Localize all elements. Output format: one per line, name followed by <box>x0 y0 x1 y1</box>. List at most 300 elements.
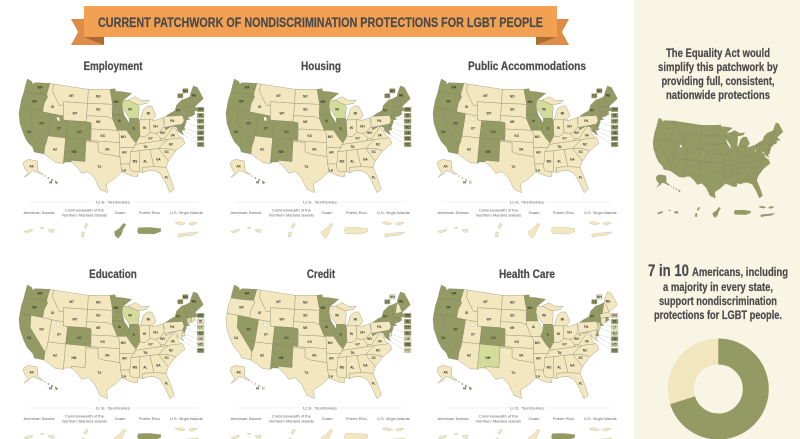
state labels: OR <box>239 305 244 309</box>
state labels: RI <box>613 114 616 118</box>
state labels: NM <box>486 150 491 154</box>
state labels: AZ <box>467 147 471 151</box>
state labels: NV <box>39 122 45 126</box>
state labels: HI <box>463 181 466 185</box>
state labels: WI <box>128 107 132 111</box>
state labels: MA <box>612 314 618 318</box>
state labels: ME <box>399 93 403 97</box>
state labels: WY <box>279 318 285 322</box>
state labels: NM <box>486 356 491 360</box>
state labels: GA <box>156 158 161 162</box>
state labels: NC <box>583 348 588 352</box>
state labels: CO <box>77 130 82 134</box>
state labels: AR <box>122 357 127 361</box>
text block: Equality Act statement: providing full, consistent, <box>662 76 774 88</box>
state labels: OK <box>519 148 524 152</box>
state labels: ID <box>465 311 469 315</box>
state labels: NH <box>597 89 602 93</box>
state labels: AK <box>29 164 35 168</box>
state labels: AL <box>557 159 562 163</box>
state labels: CO <box>284 130 289 134</box>
state labels: TX <box>304 371 309 375</box>
territories on national map <box>657 206 775 218</box>
callout boxes <box>591 295 618 353</box>
state labels: UT <box>264 333 268 337</box>
state labels <box>234 86 411 185</box>
state labels: NH <box>390 89 395 93</box>
heading: Education: Education <box>89 268 137 281</box>
state labels: CA <box>27 130 32 134</box>
U.S. territories: U.S. Territories <box>96 407 130 411</box>
U.S. territories: Commonwealth of the <box>479 415 518 419</box>
state labels: RI <box>406 320 409 324</box>
US state map <box>433 79 617 193</box>
state labels: IL <box>547 127 549 131</box>
state labels: NH <box>183 89 188 93</box>
state labels: LA <box>536 374 541 378</box>
state labels: CT <box>406 119 410 123</box>
U.S. territories: U.S. Virgin Islands <box>584 417 617 421</box>
state labels: DC <box>405 143 411 147</box>
state labels: AL <box>350 365 355 369</box>
state labels: DE <box>405 337 410 341</box>
U.S. territories: U.S. Virgin Islands <box>377 417 410 421</box>
state labels: OH <box>153 330 158 334</box>
U.S. territories: American Samoa <box>437 417 470 421</box>
state labels <box>441 86 618 185</box>
state labels: MD <box>612 137 618 141</box>
state labels: NE <box>303 120 308 124</box>
callout boxes <box>591 89 618 147</box>
state labels: MD <box>198 137 204 141</box>
donut chart: 70 percent support <box>681 352 756 426</box>
state labels: NM <box>72 150 77 154</box>
U.S. territories <box>437 407 617 439</box>
U.S. territories: U.S. Virgin Islands <box>584 211 617 215</box>
U.S. territories: Commonwealth of the <box>65 415 104 419</box>
state labels: NC <box>169 142 174 146</box>
state labels: IL <box>133 333 135 337</box>
state labels: MT <box>483 300 488 304</box>
state labels: SC <box>164 356 170 360</box>
U.S. territories: Northern Mariana Islands <box>62 214 107 218</box>
state labels: MS <box>340 159 344 163</box>
state labels: VA <box>171 339 175 343</box>
U.S. territories: U.S. Territories <box>96 201 130 205</box>
U.S. territories <box>230 201 410 238</box>
state labels: VT <box>592 300 596 304</box>
state labels: NY <box>383 314 388 318</box>
state labels: MN <box>321 306 326 310</box>
state labels: KS <box>100 340 105 344</box>
state labels: ID <box>258 311 262 315</box>
state labels: AK <box>443 370 449 374</box>
state labels: PA <box>584 119 589 123</box>
state labels: ID <box>258 105 262 109</box>
state labels: MI <box>354 112 357 116</box>
state labels: MN <box>528 306 533 310</box>
state labels: NJ <box>613 125 617 129</box>
state labels: KY <box>562 137 568 141</box>
state labels: HI <box>463 387 466 391</box>
state labels: IN <box>350 332 354 336</box>
U.S. territories <box>437 201 617 238</box>
state labels: DC <box>198 143 204 147</box>
state labels: ID <box>51 311 55 315</box>
state labels: VT <box>178 300 182 304</box>
state labels: NV <box>453 328 459 332</box>
state labels: MN <box>114 100 119 104</box>
panel: Credit map <box>226 268 411 439</box>
U.S. territories: Northern Mariana Islands <box>269 420 314 424</box>
state labels: ND <box>510 94 515 98</box>
text block: 7 in 10 statistic: 7 in 10 <box>648 262 689 280</box>
state labels: LA <box>122 168 127 172</box>
state labels: PA <box>170 119 175 123</box>
state labels: AZ <box>467 353 471 357</box>
state labels: KY <box>355 343 361 347</box>
state labels: MD <box>612 343 618 347</box>
state labels: MS <box>133 159 137 163</box>
state labels: AZ <box>260 353 264 357</box>
state labels: IN <box>143 126 147 130</box>
callout boxes <box>177 295 204 353</box>
state labels: ND <box>303 300 308 304</box>
state labels: ID <box>465 105 469 109</box>
callout boxes <box>384 295 411 353</box>
U.S. territories: Guam <box>321 211 332 215</box>
state labels: OH <box>567 330 572 334</box>
panel: Equality Act sidebar background <box>634 0 800 439</box>
state labels: ME <box>192 299 196 303</box>
U.S. territories: Puerto Rico <box>553 211 574 215</box>
state labels: ND <box>96 300 101 304</box>
U.S. territories: Guam <box>321 417 332 421</box>
state labels: NE <box>510 326 515 330</box>
state labels: DC <box>198 349 204 353</box>
state labels: GA <box>570 364 575 368</box>
state labels: SD <box>303 313 308 317</box>
state labels: LA <box>329 168 334 172</box>
U.S. territories <box>23 407 203 439</box>
state labels: MA <box>612 108 618 112</box>
U.S. territories: U.S. Territories <box>303 201 337 205</box>
state labels: NH <box>390 295 395 299</box>
state labels: WI <box>128 313 132 317</box>
state labels: IA <box>532 119 536 123</box>
state labels: MA <box>405 108 411 112</box>
state labels: RI <box>613 320 616 324</box>
state labels: MS <box>133 365 137 369</box>
state labels: MD <box>405 137 411 141</box>
state labels: TN <box>143 145 148 149</box>
U.S. territories: Puerto Rico <box>139 417 160 421</box>
state labels: AR <box>122 151 127 155</box>
U.S. territories: Guam <box>114 211 125 215</box>
state labels: WY <box>486 318 492 322</box>
state labels: FL <box>579 175 583 179</box>
state labels: GA <box>156 364 161 368</box>
U.S. territories: Puerto Rico <box>553 417 574 421</box>
state labels: OH <box>360 330 365 334</box>
US state map <box>226 285 410 399</box>
text block: 7 in 10 statistic <box>648 262 788 322</box>
state labels <box>27 86 204 185</box>
state labels: KY <box>562 343 568 347</box>
U.S. territories: American Samoa <box>230 417 263 421</box>
panel: Public Accommodations map <box>433 60 618 238</box>
state labels: KS <box>307 340 312 344</box>
state labels: CA <box>441 130 446 134</box>
state labels: RI <box>199 320 202 324</box>
state labels: TN <box>350 351 355 355</box>
text block: Equality Act statement: The Equality Act would <box>666 48 770 60</box>
state labels: ID <box>51 105 55 109</box>
state labels: WA <box>451 86 457 90</box>
state labels: OK <box>312 148 317 152</box>
U.S. territories: Puerto Rico <box>139 211 160 215</box>
state labels: WV <box>367 337 373 341</box>
state labels: AZ <box>260 147 264 151</box>
state labels: AR <box>329 357 334 361</box>
state labels: SD <box>96 313 101 317</box>
state labels: FL <box>165 175 169 179</box>
state labels: KY <box>148 137 154 141</box>
state labels: VT <box>385 94 389 98</box>
state labels: ND <box>510 300 515 304</box>
state labels: RI <box>199 114 202 118</box>
state labels: NJ <box>406 125 410 129</box>
state labels: NY <box>590 314 595 318</box>
state labels: VA <box>585 133 589 137</box>
state labels: NV <box>246 328 252 332</box>
state labels: VT <box>592 94 596 98</box>
state labels: TN <box>350 145 355 149</box>
state labels: OR <box>446 99 451 103</box>
state labels: CA <box>234 130 239 134</box>
U.S. territories: Northern Mariana Islands <box>476 214 521 218</box>
U.S. territories: Guam <box>528 211 539 215</box>
state labels: IL <box>340 333 342 337</box>
state labels: WA <box>37 86 43 90</box>
state labels: MO <box>535 135 540 139</box>
state labels: MA <box>198 108 204 112</box>
state labels: NC <box>583 142 588 146</box>
state labels: MI <box>354 318 357 322</box>
state labels: MA <box>198 314 204 318</box>
state labels: MD <box>405 343 411 347</box>
state labels: WI <box>335 107 339 111</box>
state labels: KY <box>355 137 361 141</box>
U.S. territories: Commonwealth of the <box>479 209 518 213</box>
state labels: OH <box>360 124 365 128</box>
panel: Education map <box>19 268 204 439</box>
state labels: WY <box>486 112 492 116</box>
U.S. territories: Guam <box>528 417 539 421</box>
state labels: NV <box>453 122 459 126</box>
state labels: GA <box>570 158 575 162</box>
state labels: VA <box>378 133 382 137</box>
state labels: FL <box>579 381 583 385</box>
state labels: ND <box>303 94 308 98</box>
state labels: AL <box>143 159 148 163</box>
state labels: CT <box>199 325 203 329</box>
state labels: AR <box>329 151 334 155</box>
state labels: NM <box>72 356 77 360</box>
state labels: CA <box>234 336 239 340</box>
state labels: MO <box>328 341 333 345</box>
state labels: NC <box>169 348 174 352</box>
state labels: DC <box>405 349 411 353</box>
state labels: ME <box>192 93 196 97</box>
state labels: AK <box>236 164 242 168</box>
state labels: MO <box>328 135 333 139</box>
state labels: WV <box>160 337 166 341</box>
state labels: WA <box>451 292 457 296</box>
state labels: WV <box>574 337 580 341</box>
state labels: NE <box>96 120 101 124</box>
U.S. territories: Puerto Rico <box>346 417 367 421</box>
U.S. territories: U.S. Territories <box>510 407 544 411</box>
state labels: NH <box>597 295 602 299</box>
state labels: NE <box>510 120 515 124</box>
state labels: WY <box>72 112 78 116</box>
state labels: MT <box>276 300 281 304</box>
state labels: CT <box>406 325 410 329</box>
U.S. territories: U.S. Territories <box>510 201 544 205</box>
state labels: SC <box>578 356 584 360</box>
national map: all states protected <box>653 118 783 218</box>
state labels: IA <box>532 325 536 329</box>
state labels <box>27 292 204 391</box>
state labels: AL <box>143 365 148 369</box>
U.S. territories <box>230 407 410 439</box>
state labels: TN <box>143 351 148 355</box>
state labels: GA <box>363 364 368 368</box>
state labels: NY <box>176 108 181 112</box>
state labels: OR <box>239 99 244 103</box>
state labels: CO <box>491 336 496 340</box>
state labels: FL <box>372 175 376 179</box>
state labels: DC <box>612 143 618 147</box>
state labels: ME <box>606 299 610 303</box>
state labels: MO <box>535 341 540 345</box>
text block: 7 in 10 statistic: a majority in every state, <box>663 282 773 294</box>
U.S. territories: Northern Mariana Islands <box>476 420 521 424</box>
state labels: NM <box>279 356 284 360</box>
state labels: MI <box>561 318 564 322</box>
title banner: CURRENT PATCHWORK OF NONDISCRIMINATION PROTECTIONS FOR LGBT PEOPLE <box>98 15 543 30</box>
state labels: TN <box>557 351 562 355</box>
state labels: RI <box>406 114 409 118</box>
state labels: CA <box>441 336 446 340</box>
state labels: HI <box>49 387 52 391</box>
panel: Housing map <box>226 60 411 238</box>
state labels: OK <box>519 354 524 358</box>
state labels: NY <box>590 108 595 112</box>
state labels: NV <box>246 122 252 126</box>
state labels: WI <box>542 107 546 111</box>
state labels: MI <box>147 318 150 322</box>
U.S. territories: American Samoa <box>23 211 56 215</box>
state labels: OR <box>32 99 37 103</box>
state labels: MO <box>121 135 126 139</box>
US state map <box>19 285 203 399</box>
state labels: MS <box>547 159 551 163</box>
state labels: IN <box>557 332 561 336</box>
state labels: DC <box>612 349 618 353</box>
state labels: UT <box>57 127 61 131</box>
state labels: OR <box>32 305 37 309</box>
state labels: NY <box>176 314 181 318</box>
text block: Equality Act statement: nationwide protections <box>666 90 770 102</box>
state labels: WV <box>367 131 373 135</box>
state labels: PA <box>584 325 589 329</box>
state labels: MT <box>69 300 74 304</box>
state labels: SD <box>303 107 308 111</box>
state labels: DE <box>198 131 203 135</box>
U.S. territories: American Samoa <box>437 211 470 215</box>
U.S. territories: American Samoa <box>23 417 56 421</box>
state labels: WA <box>244 292 250 296</box>
US state map <box>19 79 203 193</box>
state labels: VA <box>171 133 175 137</box>
callout boxes <box>384 89 411 147</box>
state labels: HI <box>49 181 52 185</box>
state labels: OR <box>446 305 451 309</box>
state labels: UT <box>57 333 61 337</box>
state labels: NC <box>376 142 381 146</box>
state labels: NJ <box>199 331 203 335</box>
state labels: IL <box>340 127 342 131</box>
state labels: IN <box>557 126 561 130</box>
state labels: OH <box>153 124 158 128</box>
state labels: FL <box>165 381 169 385</box>
state labels: NC <box>376 348 381 352</box>
state labels: MS <box>340 365 344 369</box>
state labels: IA <box>325 119 329 123</box>
state labels: WV <box>160 131 166 135</box>
state labels: FL <box>372 381 376 385</box>
state labels: TX <box>511 165 516 169</box>
state labels: DE <box>612 131 617 135</box>
U.S. territories: Puerto Rico <box>346 211 367 215</box>
state labels: SD <box>96 107 101 111</box>
state labels: WY <box>279 112 285 116</box>
state labels: ME <box>606 93 610 97</box>
state labels: DE <box>612 337 617 341</box>
state labels: WI <box>335 313 339 317</box>
state labels: AK <box>236 370 242 374</box>
state labels: HI <box>256 387 259 391</box>
state labels: IA <box>325 325 329 329</box>
state labels: OK <box>105 148 110 152</box>
state labels: UT <box>471 333 475 337</box>
state labels: OK <box>312 354 317 358</box>
state labels: LA <box>329 374 334 378</box>
state labels: AK <box>29 370 35 374</box>
state labels: MN <box>321 100 326 104</box>
state labels <box>234 292 411 391</box>
state labels <box>441 292 618 391</box>
state labels: KY <box>148 343 154 347</box>
state labels: TN <box>557 145 562 149</box>
state labels: CT <box>613 325 617 329</box>
state labels: AZ <box>53 147 57 151</box>
state labels: VT <box>178 94 182 98</box>
state labels: OH <box>567 124 572 128</box>
U.S. territories: U.S. Virgin Islands <box>170 417 203 421</box>
